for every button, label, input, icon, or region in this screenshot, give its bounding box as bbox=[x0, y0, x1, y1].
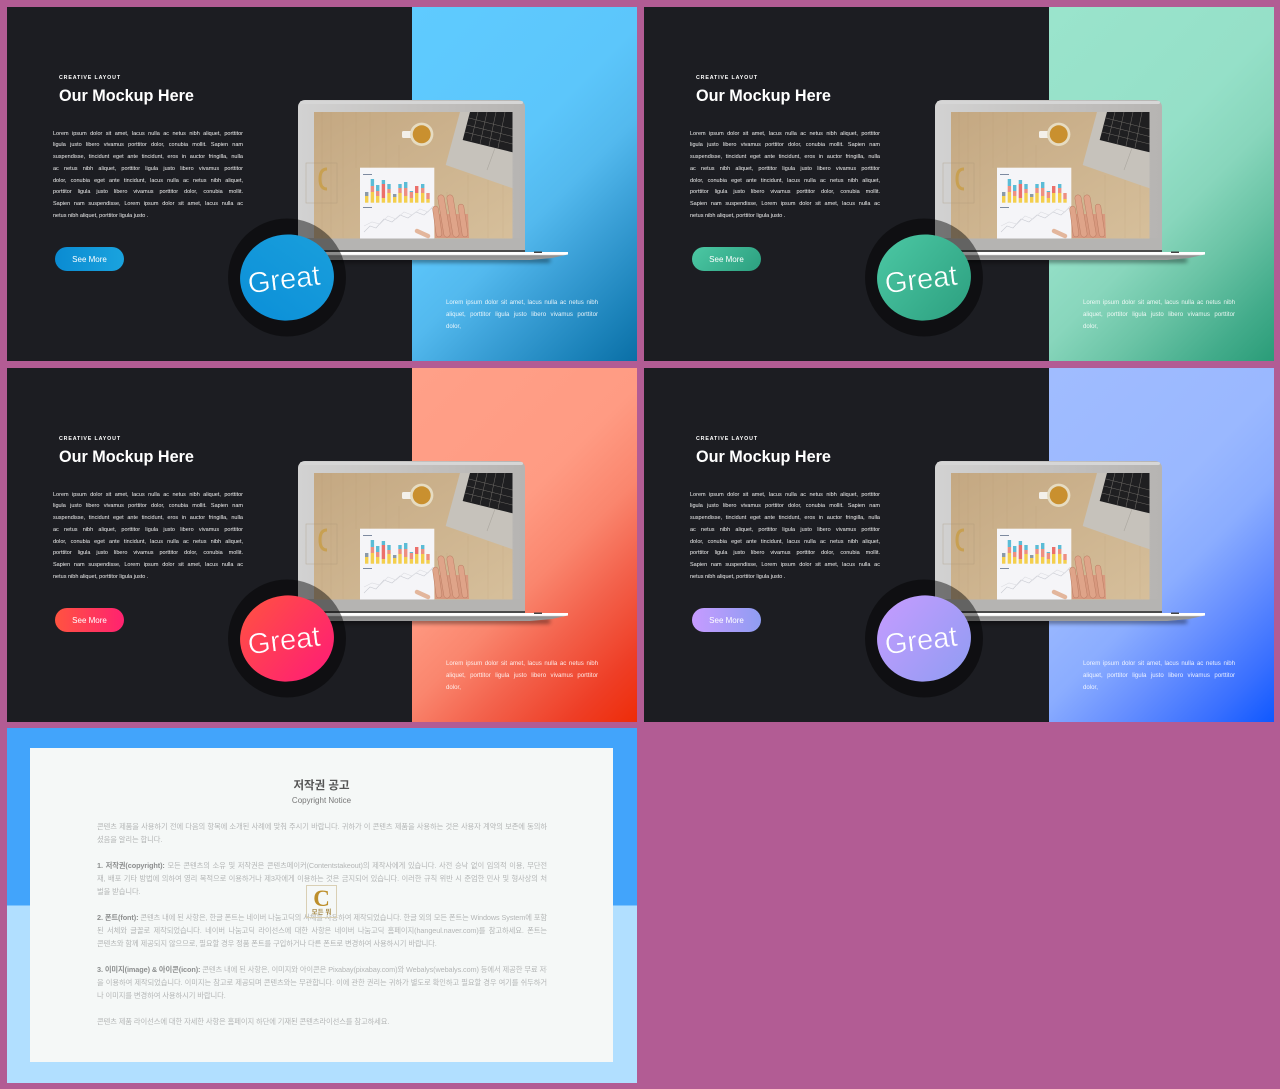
caption text: dolor, bbox=[1083, 684, 1098, 691]
body text: ligula justo libero vivamus porttitor dolor, conubia mollit. Sapien nam bbox=[53, 503, 243, 509]
section 3: image and icon: 을 이용하여 제작되었습니다. 이미지는 참고로 제공되며 콘텐츠와는 무관합니다. 이에 관한 권리는 귀하가 별도로 확인하고 필요할 경우 여기를 쉬두하거 bbox=[97, 978, 547, 986]
green gradient panel bbox=[1049, 7, 1274, 361]
caption text: dolor, bbox=[446, 323, 461, 330]
title: Our Mockup Here bbox=[696, 86, 831, 104]
body text: suspendisse, tincidunt eget ante tincidunt, eros in auctor fringilla, nulla bbox=[53, 515, 243, 521]
caption text: aliquet, porttitor ligula justo libero vivamus porttitor bbox=[446, 672, 598, 679]
notice title: 저작권 공고 bbox=[293, 780, 350, 792]
intro paragraph bbox=[97, 822, 547, 844]
intro paragraph: 셨음을 알리는 합니다. bbox=[97, 834, 162, 844]
laptop mockup with badge bbox=[865, 100, 1205, 336]
notice card bbox=[30, 748, 613, 1062]
body text: suspendisse, tincidunt eget ante tincidunt, eros in auctor fringilla, nulla bbox=[53, 154, 243, 160]
body text bbox=[53, 492, 243, 580]
body text bbox=[690, 130, 880, 219]
body text: Lorem ipsum dolor sit amet, lacus nulla ac netus nibh aliquet, porttitor bbox=[690, 130, 880, 136]
section 3: image and icon: 3. 이미지(image) & 아이콘(icon): 콘텐츠 내에 된 사항은, 이미지와 아이콘은 Pixabay(pixabay.com)와 Webalys(webalys.com) 등에서 제공한 무료 저작물 bbox=[97, 964, 547, 974]
button: See More bbox=[72, 616, 107, 625]
body text: Sapien nam suspendisse, Lorem ipsum dolor sit amet, lacus nulla ac bbox=[53, 201, 243, 207]
body text: ac netus nibh aliquet, porttitor ligula justo libero vivamus porttitor bbox=[690, 527, 880, 533]
caption text bbox=[446, 660, 598, 691]
dark background bbox=[644, 368, 1049, 722]
title: Our Mockup Here bbox=[59, 448, 194, 466]
body text: Sapien nam suspendisse, Lorem ipsum dolor sit amet, lacus nulla ac bbox=[690, 562, 880, 568]
body text: ac netus nibh aliquet, porttitor ligula justo libero vivamus porttitor bbox=[690, 166, 880, 172]
badge text: Great bbox=[883, 260, 959, 300]
caption text bbox=[446, 298, 598, 330]
body text: ligula justo libero vivamus porttitor dolor, conubia mollit. Sapien nam bbox=[690, 142, 880, 148]
button bbox=[55, 608, 124, 632]
body text: netus nibh aliquet, porttitor ligula justo . bbox=[690, 574, 785, 580]
body text: Sapien nam suspendisse, Lorem ipsum dolor sit amet, lacus nulla ac bbox=[690, 201, 880, 207]
body text: dolor, conubia eget ante tincidunt, lacus nulla ac netus nibh aliquet, bbox=[53, 178, 243, 184]
body text: porttitor ligula justo libero vivamus porttitor dolor, conubia mollit. bbox=[690, 189, 880, 195]
caption text: aliquet, porttitor ligula justo libero vivamus porttitor bbox=[1083, 311, 1235, 318]
badge text: Great bbox=[883, 621, 959, 661]
periwinkle gradient panel bbox=[1049, 368, 1274, 722]
body text: Sapien nam suspendisse, Lorem ipsum dolor sit amet, lacus nulla ac bbox=[53, 562, 243, 568]
body text: Lorem ipsum dolor sit amet, lacus nulla ac netus nibh aliquet, porttitor bbox=[53, 492, 243, 498]
body text: ligula justo libero vivamus porttitor dolor, conubia mollit. Sapien nam bbox=[53, 142, 243, 148]
button: See More bbox=[709, 616, 744, 625]
button: See More bbox=[709, 255, 744, 264]
logo watermark bbox=[306, 885, 337, 918]
caption text: dolor, bbox=[446, 684, 461, 691]
body text bbox=[53, 130, 243, 219]
dark background bbox=[644, 7, 1049, 361]
section 1: copyright: 1. 저작권(copyright): 모든 콘텐츠의 소유 및 저작권은 콘텐츠메이커(Contentstakeout)의 제작사에게 있습니다. 사전 승낙 없이 임의적 이용, 무단전 bbox=[97, 860, 547, 870]
laptop mockup with badge bbox=[228, 461, 568, 698]
eyebrow label: CREATIVE LAYOUT bbox=[696, 75, 758, 81]
body text: netus nibh aliquet, porttitor ligula justo . bbox=[690, 213, 785, 219]
caption text: Lorem ipsum dolor sit amet, lacus nulla ac netus nibh bbox=[446, 298, 598, 306]
panel: red slide bbox=[7, 368, 637, 722]
license footer line: 콘텐츠 제품 라이선스에 대한 자세한 사항은 홈페이지 하단에 기재된 콘텐츠라이선스를 참고하세요. bbox=[97, 1016, 389, 1026]
body text: suspendisse, tincidunt eget ante tincidunt, eros in auctor fringilla, nulla bbox=[690, 515, 880, 521]
section 2: font: 된 서체와 글꼴로 제작되었습니다. 네이버 나눔고딕 라이선스에 대한 사항은 네이버 나눔고딕 홈페이지(hangeul.naver.com)를 참고하세요. 폰트는 bbox=[97, 926, 547, 934]
caption text: Lorem ipsum dolor sit amet, lacus nulla ac netus nibh bbox=[446, 660, 598, 666]
section 1: copyright: 재, 배포 기타 방법에 의하여 영리 목적으로 이용하거나 제3자에게 이용하는 것은 금지되어 있습니다. 이러한 규칙 위반 시 준엄한 민사 및 형사상의 처 bbox=[97, 874, 547, 882]
section 1: copyright bbox=[97, 860, 547, 896]
section 3: image and icon: 나 이미지를 변경하여 사용하시기 바랍니다. bbox=[97, 990, 226, 1000]
section 1: copyright: 벌을 받습니다. bbox=[97, 886, 141, 896]
eyebrow label: CREATIVE LAYOUT bbox=[59, 75, 121, 81]
button bbox=[55, 247, 124, 271]
dark background bbox=[7, 7, 412, 361]
caption text: Lorem ipsum dolor sit amet, lacus nulla ac netus nibh bbox=[1083, 298, 1235, 306]
badge text: Great bbox=[246, 260, 322, 300]
panel: blue slide bbox=[7, 7, 637, 361]
title: Our Mockup Here bbox=[696, 448, 831, 466]
panel: purple slide bbox=[644, 368, 1274, 722]
body text bbox=[690, 492, 880, 580]
body text: Lorem ipsum dolor sit amet, lacus nulla ac netus nibh aliquet, porttitor bbox=[690, 492, 880, 498]
logo watermark: C bbox=[313, 886, 330, 911]
body text: ac netus nibh aliquet, porttitor ligula justo libero vivamus porttitor bbox=[53, 527, 243, 533]
body text: dolor, conubia eget ante tincidunt, lacus nulla ac netus nibh aliquet, bbox=[690, 178, 880, 184]
caption text bbox=[1083, 660, 1235, 691]
badge text: Great bbox=[246, 621, 322, 661]
panel: green slide bbox=[644, 7, 1274, 361]
intro paragraph: 콘텐츠 제품을 사용하기 전에 다음의 항목에 소개된 사례에 맞춰 주시기 바랍니다. 귀하가 이 콘텐츠 제품을 사용하는 것은 사용자 계약의 보존에 동의하 bbox=[97, 822, 547, 830]
laptop mockup with badge bbox=[865, 461, 1205, 698]
body text: porttitor ligula justo libero vivamus porttitor dolor, conubia mollit. bbox=[690, 550, 880, 556]
dark background bbox=[7, 368, 412, 722]
caption text: aliquet, porttitor ligula justo libero vivamus porttitor bbox=[446, 311, 598, 318]
section 2: font: 2. 폰트(font): 콘텐츠 내에 된 사항은, 한글 폰트는 네이버 나눔고딕의 서체를 사용하여 제작되었습니다. 한글 외의 모든 폰트는 Windows System에 포함 bbox=[97, 912, 547, 922]
panel: copyright notice bbox=[7, 728, 637, 1083]
eyebrow label: CREATIVE LAYOUT bbox=[696, 436, 758, 442]
caption text bbox=[1083, 298, 1235, 330]
body text: netus nibh aliquet, porttitor ligula justo . bbox=[53, 574, 148, 580]
body text: suspendisse, tincidunt eget ante tincidunt, eros in auctor fringilla, nulla bbox=[690, 154, 880, 160]
caption text: aliquet, porttitor ligula justo libero vivamus porttitor bbox=[1083, 672, 1235, 679]
body text: ligula justo libero vivamus porttitor dolor, conubia mollit. Sapien nam bbox=[690, 503, 880, 509]
eyebrow label: CREATIVE LAYOUT bbox=[59, 436, 121, 442]
body text: Lorem ipsum dolor sit amet, lacus nulla ac netus nibh aliquet, porttitor bbox=[53, 130, 243, 136]
logo watermark: 모든 뭐 bbox=[312, 909, 331, 916]
button: See More bbox=[72, 255, 107, 264]
body text: netus nibh aliquet, porttitor ligula justo . bbox=[53, 213, 148, 219]
body text: porttitor ligula justo libero vivamus porttitor dolor, conubia mollit. bbox=[53, 189, 243, 195]
button bbox=[692, 247, 761, 271]
laptop mockup with badge bbox=[228, 100, 568, 336]
body text: dolor, conubia eget ante tincidunt, lacus nulla ac netus nibh aliquet, bbox=[690, 539, 880, 545]
button bbox=[692, 608, 761, 632]
caption text: dolor, bbox=[1083, 323, 1098, 330]
section 3: image and icon bbox=[97, 964, 547, 1000]
title: Our Mockup Here bbox=[59, 86, 194, 104]
body text: ac netus nibh aliquet, porttitor ligula justo libero vivamus porttitor bbox=[53, 166, 243, 172]
section 2: font bbox=[97, 912, 547, 948]
caption text: Lorem ipsum dolor sit amet, lacus nulla ac netus nibh bbox=[1083, 660, 1235, 666]
blue gradient panel bbox=[412, 7, 637, 361]
section 2: font: 콘텐츠와 함께 제공되지 않으므로, 필요할 경우 정품 폰트를 구입하거나 다른 폰트로 변경하여 사용하시기 바랍니다. bbox=[97, 938, 437, 948]
notice subtitle: Copyright Notice bbox=[292, 796, 351, 805]
body text: porttitor ligula justo libero vivamus porttitor dolor, conubia mollit. bbox=[53, 550, 243, 556]
body text: dolor, conubia eget ante tincidunt, lacus nulla ac netus nibh aliquet, bbox=[53, 539, 243, 545]
red gradient panel bbox=[412, 368, 637, 722]
